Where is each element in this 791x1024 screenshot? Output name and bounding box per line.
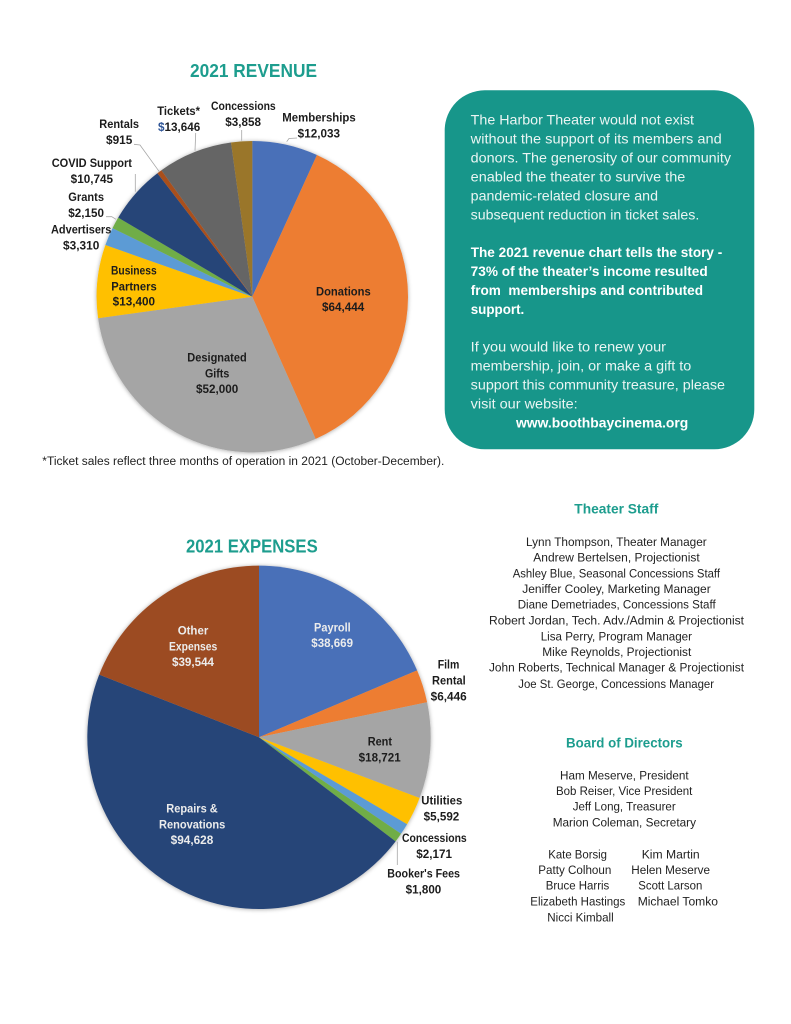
slice: rentals <box>157 170 252 297</box>
text block: bold revenue statement: support. <box>471 302 524 317</box>
label: booker's fees <box>387 869 460 896</box>
label: rentals <box>99 119 139 147</box>
text block: staff list: Diane Demetriades, Concessions Staff <box>518 598 716 612</box>
label: concessions <box>211 101 276 129</box>
label: utilities: $5,592 <box>424 812 459 824</box>
text block: call to action <box>471 340 725 431</box>
slice: designated gifts <box>98 297 316 452</box>
slice: rent <box>259 702 431 798</box>
label: concessions: Concessions <box>402 833 467 845</box>
slice: booker's fees <box>259 737 401 841</box>
label: business partners: Business <box>111 265 157 277</box>
pie chart: 2021 revenue <box>51 101 408 452</box>
text block: board officers <box>553 768 697 830</box>
label: covid support: COVID Support <box>52 158 132 170</box>
label: donations: $64,444 <box>322 302 365 314</box>
label: film rental: $6,446 <box>431 691 467 703</box>
label: covid support: $10,745 <box>71 174 114 186</box>
text block: staff list: Lisa Perry, Program Manager <box>541 629 692 643</box>
text block: staff list: Ashley Blue, Seasonal Concessions Staff <box>513 566 721 580</box>
heading: board of directors: Board of Directors <box>566 735 683 750</box>
text block: staff list <box>489 535 745 691</box>
label: other expenses: $39,544 <box>172 657 215 669</box>
leader lines: revenue <box>106 130 297 219</box>
text block: bold revenue statement: The 2021 revenue chart tells the story - <box>471 245 722 260</box>
label: other expenses: Expenses <box>169 642 217 654</box>
label: grants: Grants <box>68 192 104 204</box>
text block: staff list: Joe St. George, Concessions Manager <box>518 677 714 691</box>
text block: board members: Bruce Harris <box>546 879 609 893</box>
text block: staff list: Robert Jordan, Tech. Adv./Admin & Projectionist <box>489 614 745 628</box>
label: utilities: Utilities <box>421 796 462 808</box>
label: concessions: $3,858 <box>225 117 262 129</box>
label: repairs and renovations <box>159 804 225 847</box>
label: payroll: $38,669 <box>311 638 353 650</box>
text block: board members: Kate Borsig <box>548 847 607 861</box>
text block: call to action: www.boothbaycinema.org <box>515 416 688 431</box>
panel: support message <box>445 90 754 449</box>
label: film rental <box>431 660 467 703</box>
text block: staff list: Andrew Bertelsen, Projectionist <box>533 551 700 565</box>
text block: board members: Nicci Kimball <box>547 910 614 924</box>
slice: repairs and renovations <box>87 675 396 909</box>
text block: board members: Michael Tomko <box>638 894 718 908</box>
text block: board officers: Marion Coleman, Secretary <box>553 816 697 830</box>
label: rentals: $915 <box>106 135 133 147</box>
slice: concessions <box>231 141 252 297</box>
text block: intro paragraph: without the support of its members and <box>470 131 722 146</box>
text block: staff list: Jeniffer Cooley, Marketing Manager <box>522 582 711 596</box>
label: booker's fees: Booker's Fees <box>387 869 460 881</box>
label: booker's fees: $1,800 <box>406 884 441 896</box>
text block: staff list: Lynn Thompson, Theater Manager <box>526 535 707 549</box>
text block: call to action: If you would like to renew your <box>471 340 666 355</box>
text block: board members: Helen Meserve <box>631 863 710 877</box>
text block: intro paragraph: donors. The generosity of our community <box>471 150 731 165</box>
slice: covid support <box>118 173 252 297</box>
label: covid support <box>52 158 132 186</box>
label: repairs and renovations: Repairs & <box>166 804 218 816</box>
label: advertisers: $3,310 <box>63 240 99 252</box>
label: film rental: Rental <box>432 676 466 688</box>
label: business partners: Partners <box>111 281 157 293</box>
title: 2021 expenses: 2021 EXPENSES <box>186 537 318 557</box>
label: repairs and renovations: $94,628 <box>171 835 214 847</box>
label: memberships: Memberships <box>282 112 356 124</box>
slice: memberships <box>252 141 317 297</box>
label: memberships <box>282 112 356 140</box>
text block: intro paragraph <box>470 112 731 222</box>
text block: board officers: Jeff Long, Treasurer <box>573 800 676 814</box>
label: donations <box>316 286 371 314</box>
text block: call to action: membership, join, or make a gift to <box>471 359 691 374</box>
text block: intro paragraph: subsequent reduction in ticket sales. <box>471 207 699 222</box>
label: concessions: Concessions <box>211 101 276 113</box>
label: donations: Donations <box>316 286 371 298</box>
label: designated gifts: Gifts <box>205 368 229 380</box>
label: memberships: $12,033 <box>298 128 340 140</box>
footnote: ticket sales: *Ticket sales reflect three months of operation in 2021 (October-December). <box>42 456 444 468</box>
label: other expenses: Other <box>178 626 209 638</box>
text block: intro paragraph: The Harbor Theater would not exist <box>471 112 694 127</box>
slice: payroll <box>259 566 417 737</box>
label: payroll <box>311 622 353 650</box>
label: business partners <box>111 265 157 309</box>
label: designated gifts: $52,000 <box>196 384 238 396</box>
heading: theater staff: Theater Staff <box>574 501 659 516</box>
text block: intro paragraph: pandemic-related closure and <box>471 188 658 203</box>
label: tickets: $13,646 <box>158 122 200 134</box>
slice: concessions <box>259 737 407 834</box>
text block: board members: Kim Martin <box>642 847 700 861</box>
slice: film rental <box>259 670 427 737</box>
label: repairs and renovations: Renovations <box>159 819 225 831</box>
slice: grants <box>112 218 252 297</box>
slice: advertisers <box>105 228 252 297</box>
slice: tickets <box>161 142 252 297</box>
label: concessions <box>402 833 467 861</box>
label: business partners: $13,400 <box>113 297 155 309</box>
pie chart: 2021 expenses <box>87 566 467 909</box>
slice: other expenses <box>99 566 259 737</box>
label: rentals: Rentals <box>99 119 139 131</box>
text block: board officers: Bob Reiser, Vice President <box>556 784 693 798</box>
label: tickets <box>157 106 201 134</box>
slice: utilities <box>259 737 420 824</box>
label: grants <box>68 192 104 220</box>
label: rent: Rent <box>368 736 392 748</box>
slice: donations <box>252 155 408 439</box>
text block: bold revenue statement <box>471 245 722 317</box>
text block: bold revenue statement: 73% of the theater’s income resulted <box>471 264 708 279</box>
label: advertisers <box>51 224 111 252</box>
label: tickets: Tickets* <box>157 106 201 118</box>
label: concessions: $2,171 <box>416 849 453 861</box>
text block: board members <box>530 847 718 924</box>
title: 2021 revenue: 2021 REVENUE <box>190 61 317 81</box>
label: designated gifts <box>187 353 247 396</box>
text block: staff list: Mike Reynolds, Projectionist <box>542 645 692 659</box>
label: grants: $2,150 <box>68 208 104 220</box>
label: utilities <box>421 796 462 824</box>
text block: call to action: support this community treasure, please <box>471 378 725 393</box>
label: rent <box>359 736 401 764</box>
label: rent: $18,721 <box>359 752 401 764</box>
text block: call to action: visit our website: <box>471 397 578 412</box>
leader line: booker's fees <box>396 842 398 865</box>
text block: board members: Scott Larson <box>638 879 702 893</box>
label: advertisers: Advertisers <box>51 224 111 236</box>
label: designated gifts: Designated <box>187 353 247 365</box>
text block: staff list: John Roberts, Technical Manager & Projectionist <box>489 661 745 675</box>
label: payroll: Payroll <box>314 622 351 634</box>
text block: board officers: Ham Meserve, President <box>560 768 689 782</box>
text block: board members: Elizabeth Hastings <box>530 894 625 908</box>
label: film rental: Film <box>438 660 459 672</box>
text block: board members: Patty Colhoun <box>538 863 611 877</box>
text block: intro paragraph: enabled the theater to survive the <box>471 169 685 184</box>
label: other expenses <box>169 626 217 669</box>
text block: bold revenue statement: from memberships and contributed <box>471 283 703 298</box>
slice: business partners <box>97 245 252 318</box>
